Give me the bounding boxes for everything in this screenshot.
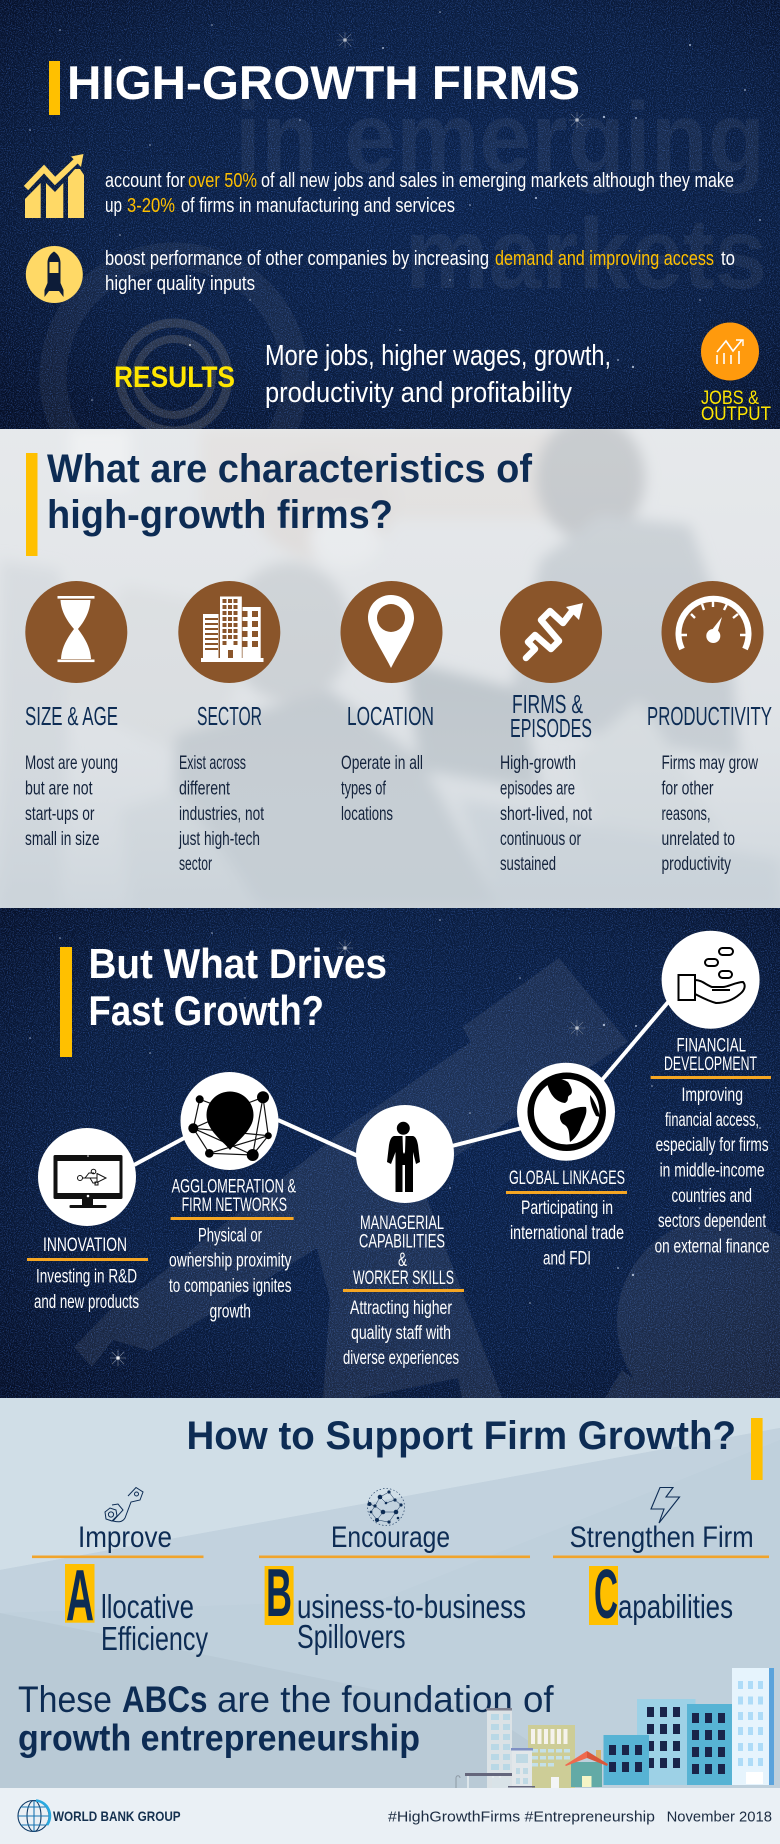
column: allocative efficiency: Efficiency <box>101 1620 208 1657</box>
column: business-to-business spillovers: Encourage <box>331 1521 450 1554</box>
date: November 2018 <box>667 1810 772 1826</box>
footer <box>0 1788 780 1844</box>
mid blue block <box>687 1704 732 1785</box>
connecting path <box>134 1001 669 1165</box>
block: global linkages: GLOBAL LINKAGES <box>509 1168 625 1189</box>
house <box>571 1762 602 1787</box>
column: sector: Exist across <box>179 753 246 774</box>
label: results: RESULTS <box>114 361 235 394</box>
ghost text: in emerging markets <box>235 82 767 310</box>
block: agglomeration: growth <box>210 1302 251 1323</box>
accent bar: drivers heading <box>60 947 72 1057</box>
block: agglomeration: FIRM NETWORKS <box>182 1195 287 1216</box>
conclusion text: ABCs <box>122 1679 208 1720</box>
block: managerial capabilities: Attracting higher <box>350 1298 452 1319</box>
column: productivity: for other <box>662 778 714 800</box>
icon: office buildings <box>178 581 280 683</box>
column: business-to-business spillovers: B <box>266 1555 292 1631</box>
column: location: locations <box>341 804 393 825</box>
icon: jobs and output: JOBS & <box>701 388 759 409</box>
icon: location pin <box>340 581 442 683</box>
title: HIGH-GROWTH FIRMS <box>67 56 580 109</box>
icon: hourglass <box>25 581 127 683</box>
block: managerial capabilities: quality staff with <box>351 1323 451 1344</box>
column: firms and episodes: sustained <box>500 854 556 875</box>
column: firms and episodes: EPISODES <box>510 713 592 743</box>
conclusion text: These <box>18 1679 112 1720</box>
block: global linkages: Participating in <box>521 1198 613 1219</box>
ghost text: in emerging markets: markets <box>405 198 767 310</box>
block: managerial capabilities: WORKER SKILLS <box>353 1268 454 1289</box>
block: managerial capabilities <box>343 1213 464 1369</box>
icon: network sphere <box>368 1488 404 1526</box>
panel: what drives fast growth <box>0 908 780 1426</box>
column: firms and episodes <box>500 689 593 875</box>
illustration: city skyline <box>456 1668 774 1788</box>
tall blue block <box>637 1699 696 1785</box>
column: allocative efficiency: llocative <box>101 1588 194 1625</box>
icon: speedometer <box>662 581 764 683</box>
heading: characteristics: What are characteristics of <box>47 447 533 491</box>
column: size and age <box>25 701 118 850</box>
column: sector: industries, not <box>179 804 265 825</box>
column: size and age: but are not <box>25 778 93 800</box>
conclusion text <box>18 1679 554 1759</box>
column: allocative efficiency: Improve <box>78 1521 172 1554</box>
column: business-to-business spillovers <box>259 1521 530 1655</box>
column: sector: SECTOR <box>197 701 262 731</box>
column: productivity: reasons, <box>662 804 710 825</box>
block: financial development <box>651 1036 771 1258</box>
panel: characteristics <box>0 416 780 908</box>
text: jobs and sales share: up <box>105 195 122 217</box>
column: size and age: Most are young <box>25 753 118 774</box>
logo: wordmark: WORLD BANK GROUP <box>53 1808 181 1824</box>
text: boost performance: demand and improving access <box>495 248 714 270</box>
column: sector: just high-tech <box>178 829 260 850</box>
column: firms and episodes: High-growth <box>500 753 576 774</box>
icon: jobs and output: OUTPUT <box>701 404 771 425</box>
column: capabilities: C <box>594 1555 618 1633</box>
hashtags: #HighGrowthFirms #Entrepreneurship <box>388 1810 655 1826</box>
icon: computer monitor with usb <box>38 1128 136 1226</box>
column: firms and episodes: episodes are <box>500 778 575 800</box>
text: jobs and sales share <box>105 170 734 217</box>
yellow office <box>528 1725 575 1788</box>
logo: world bank globe <box>18 1800 50 1832</box>
block: agglomeration: to companies ignites <box>169 1276 292 1297</box>
icon: networked pin <box>180 1072 278 1170</box>
text: boost performance: higher quality inputs <box>105 273 255 295</box>
column: productivity: unrelated to <box>662 829 735 850</box>
heading: drivers <box>88 940 387 1034</box>
low blue block <box>604 1735 649 1785</box>
accent bar: support heading <box>751 1418 763 1480</box>
icon: globe <box>517 1063 615 1161</box>
icon: jobs and output <box>701 322 771 425</box>
heading: drivers: Fast Growth? <box>88 987 324 1034</box>
column: sector: different <box>179 778 231 800</box>
column: business-to-business spillovers: usiness-to-business <box>297 1588 526 1625</box>
column: sector: sector <box>179 854 212 875</box>
icon: person in suit <box>356 1105 454 1203</box>
panel: how to support firm growth <box>0 1398 780 1788</box>
background photo <box>0 416 780 908</box>
conclusion text: are the foundation of <box>217 1679 554 1720</box>
column: location <box>341 701 434 825</box>
conclusion text: growth entrepreneurship <box>18 1718 420 1759</box>
text: jobs and sales share: of firms in manufacturing and services <box>181 195 455 217</box>
text: jobs and sales share: account for <box>105 170 185 192</box>
block: global linkages: and FDI <box>543 1249 591 1270</box>
block: agglomeration: ownership proximity <box>169 1251 292 1272</box>
column: firms and episodes: FIRMS & <box>512 689 583 719</box>
icon: rising bar chart <box>25 154 84 218</box>
column: size and age: small in size <box>25 829 100 850</box>
icon: wrench and nut <box>105 1488 143 1522</box>
column: allocative efficiency: A <box>66 1556 94 1636</box>
block: innovation: INNOVATION <box>43 1235 127 1256</box>
icon: lightning bolt <box>651 1488 680 1523</box>
text: results list <box>265 340 611 409</box>
icon: hand with coins <box>662 931 760 1029</box>
column: location: LOCATION <box>347 701 434 731</box>
block: managerial capabilities: diverse experiences <box>343 1348 459 1369</box>
column: sector <box>178 701 265 875</box>
accent bar: characteristics heading <box>26 453 38 556</box>
grey tower <box>487 1710 512 1788</box>
column: productivity: productivity <box>662 854 731 875</box>
heading: characteristics: high-growth firms? <box>47 493 393 537</box>
shelter <box>465 1773 512 1776</box>
block: innovation <box>27 1235 148 1313</box>
block: agglomeration <box>169 1177 296 1323</box>
heading: support: How to Support Firm Growth? <box>186 1414 736 1458</box>
text: jobs and sales share: over 50% <box>188 170 257 192</box>
column: productivity <box>647 701 772 875</box>
block: managerial capabilities: & <box>398 1250 407 1271</box>
block: global linkages: international trade <box>510 1223 624 1244</box>
column: capabilities: Strengthen Firm <box>570 1521 754 1554</box>
text: results list: More jobs, higher wages, growth, <box>265 340 611 372</box>
text: boost performance: to <box>721 248 735 270</box>
column: firms and episodes: continuous or <box>500 829 581 850</box>
block: managerial capabilities: MANAGERIAL <box>360 1213 444 1234</box>
column: capabilities <box>553 1521 769 1633</box>
column: location: Operate in all <box>341 753 423 774</box>
text: boost performance: boost performance of other companies by increasing <box>105 248 489 270</box>
block: innovation: Investing in R&D <box>36 1267 137 1288</box>
column: capabilities: apabilities <box>618 1588 733 1625</box>
background telescope and planet <box>74 958 780 1426</box>
accent bar: title <box>49 61 60 115</box>
block: agglomeration: AGGLOMERATION & <box>172 1177 296 1198</box>
column: business-to-business spillovers: Spillovers <box>297 1618 406 1655</box>
heading: characteristics <box>47 447 533 537</box>
text: jobs and sales share: 3-20% <box>127 195 175 217</box>
column: size and age: start-ups or <box>25 804 95 825</box>
column: firms and episodes: short-lived, not <box>500 804 593 825</box>
block: financial development: FINANCIAL <box>676 1036 746 1057</box>
column: location: types of <box>341 778 386 800</box>
panel: high-growth firms intro <box>0 0 780 498</box>
block: agglomeration: Physical or <box>198 1226 262 1247</box>
block: global linkages <box>506 1168 627 1270</box>
white tower <box>732 1668 769 1785</box>
block: financial development: Improving <box>682 1085 743 1106</box>
block: managerial capabilities: CAPABILITIES <box>359 1232 445 1253</box>
block: innovation: and new products <box>34 1292 139 1313</box>
icon: snake arrow <box>500 581 602 683</box>
background rings <box>53 256 295 498</box>
text: boost performance <box>105 248 735 295</box>
column: size and age: SIZE & AGE <box>25 701 118 731</box>
heading: drivers: But What Drives <box>88 940 387 987</box>
text: results list: productivity and profitability <box>265 377 572 409</box>
icon: rocket <box>26 246 83 303</box>
small shop <box>512 1749 532 1788</box>
column: allocative efficiency <box>32 1521 208 1657</box>
